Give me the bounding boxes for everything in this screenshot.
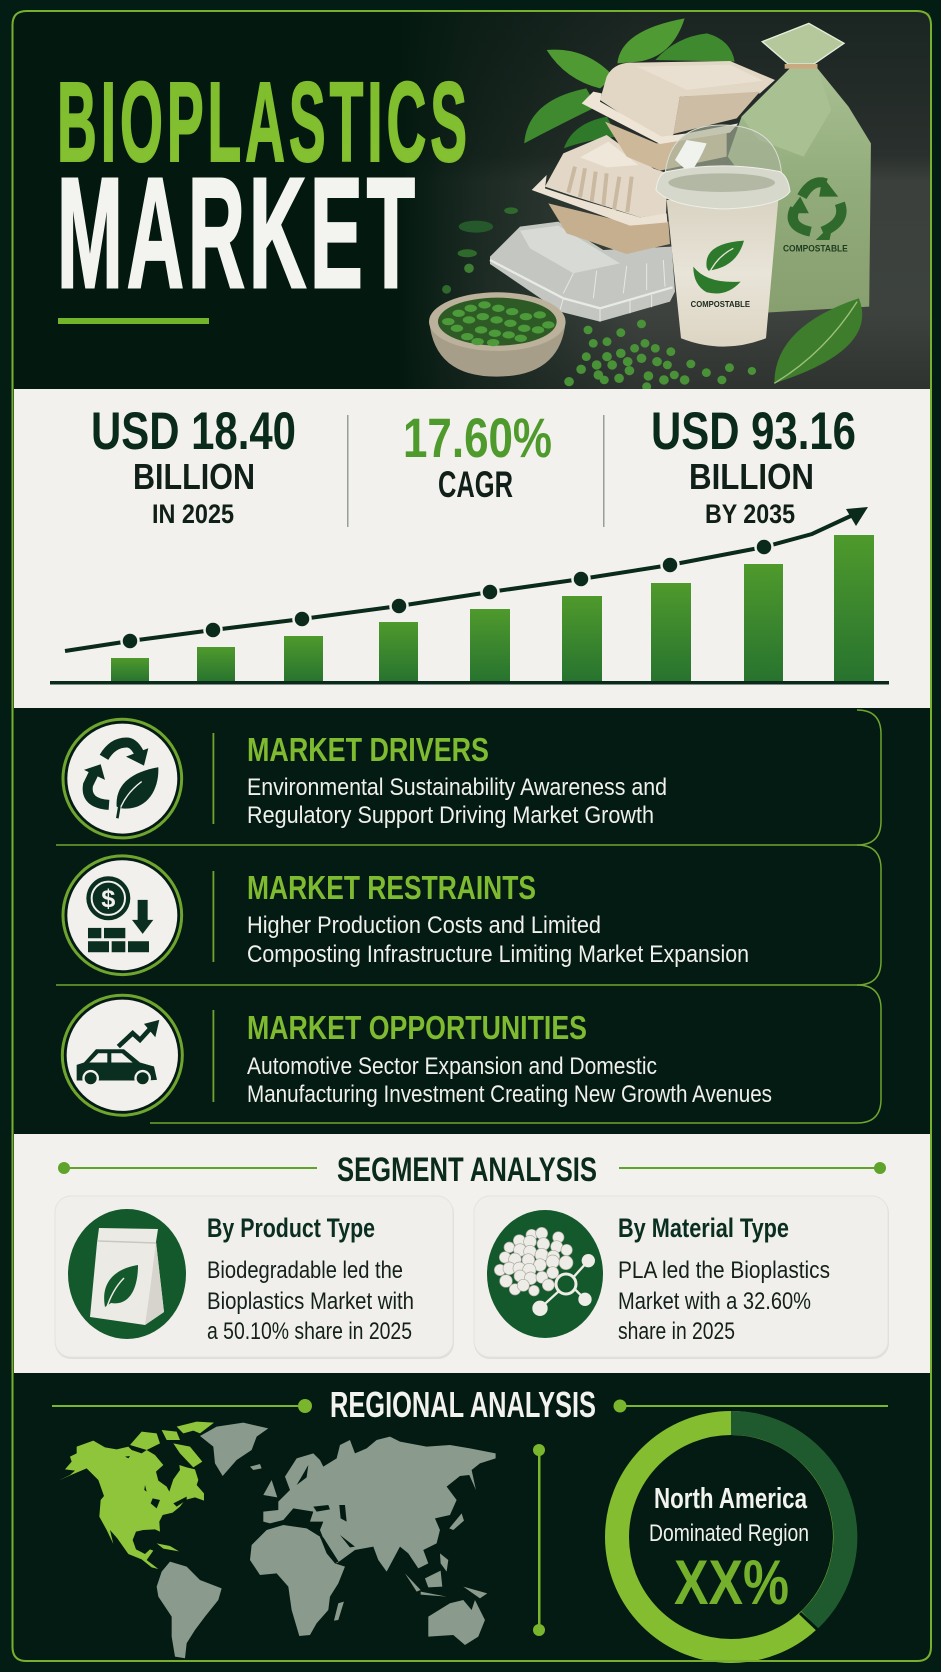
title underline bbox=[58, 318, 209, 324]
donut label: XX% bbox=[674, 1548, 789, 1618]
food containers bbox=[490, 61, 775, 322]
map: North America highlighted bbox=[58, 1422, 214, 1569]
donut label: Dominated Region bbox=[649, 1520, 809, 1547]
text: market restraints: Higher Production Costs and Limited bbox=[247, 912, 601, 939]
card: by product type bbox=[55, 1196, 454, 1359]
bowl of pellets bbox=[429, 292, 566, 377]
icon: recycling arrows and leaf bbox=[63, 719, 182, 838]
icon: PLA pellets and molecule bbox=[487, 1210, 603, 1338]
icon: compostable pouch bbox=[68, 1209, 186, 1339]
icon: cost and infrastructure: $ bbox=[101, 885, 115, 913]
panel: regional analysis bbox=[14, 1373, 930, 1661]
cup label: COMPOSTABLE bbox=[691, 299, 750, 309]
panel: hero bbox=[13, 11, 930, 391]
icon: car and rising arrow bbox=[62, 995, 182, 1115]
stat: 2035 value: BY 2035 bbox=[705, 499, 795, 529]
stat: 2035 value bbox=[651, 402, 856, 529]
text: product type: a 50.10% share in 2025 bbox=[207, 1318, 412, 1345]
text: market restraints: Composting Infrastructure Limiting Market Expansion bbox=[247, 941, 749, 968]
title line: Market: MARKET bbox=[57, 146, 419, 321]
text: market opportunities: MARKET OPPORTUNITIES bbox=[247, 1009, 587, 1046]
text: market restraints: MARKET RESTRAINTS bbox=[247, 869, 536, 906]
heading: regional analysis: REGIONAL ANALYSIS bbox=[330, 1384, 596, 1425]
stat: 2035 value: BILLION bbox=[689, 456, 814, 497]
text: material type: By Material Type bbox=[618, 1213, 789, 1243]
text: product type: Biodegradable led the bbox=[207, 1257, 403, 1284]
middle container bbox=[548, 203, 670, 254]
text: material type bbox=[618, 1213, 830, 1345]
stat: 2025 value: BILLION bbox=[133, 456, 255, 497]
text: market opportunities: Automotive Sector Expansion and Domestic bbox=[247, 1053, 657, 1080]
clear container bbox=[490, 222, 675, 322]
text: market opportunities bbox=[247, 1009, 772, 1108]
cup leaf logo bbox=[706, 241, 744, 271]
hero photo: bioplastic products bbox=[13, 12, 930, 391]
stat: 2035 value: USD 93.16 bbox=[651, 402, 856, 461]
donut chart: North America share bbox=[617, 1423, 845, 1651]
stat: CAGR: CAGR bbox=[438, 464, 513, 505]
text: market drivers: Regulatory Support Driving Market Growth bbox=[247, 802, 654, 829]
panel: market size stats and growth chart bbox=[14, 389, 930, 708]
stat: 2025 value bbox=[91, 402, 296, 529]
text: market restraints bbox=[247, 869, 749, 968]
text: product type: By Product Type bbox=[207, 1213, 375, 1243]
text: product type: Bioplastics Market with bbox=[207, 1288, 414, 1315]
text: product type bbox=[207, 1213, 414, 1345]
map: rest of world bbox=[157, 1423, 496, 1658]
text: market opportunities: Manufacturing Investment Creating New Growth Avenues bbox=[247, 1081, 772, 1108]
panel: market dynamics bbox=[14, 708, 930, 1134]
bag label: COMPOSTABLE bbox=[783, 244, 848, 254]
icon: cost and infrastructure bbox=[63, 856, 182, 975]
stat: 2025 value: USD 18.40 bbox=[91, 402, 296, 461]
top container bbox=[605, 122, 727, 171]
cup with dome lid bbox=[656, 125, 790, 347]
card: by material type bbox=[474, 1196, 889, 1359]
world map bbox=[58, 1422, 496, 1658]
stat: CAGR bbox=[403, 406, 552, 505]
text: market drivers: Environmental Sustainability Awareness and bbox=[247, 774, 667, 801]
stat: CAGR: 17.60% bbox=[403, 406, 552, 469]
text: material type: PLA led the Bioplastics bbox=[618, 1257, 830, 1284]
foreground items bbox=[429, 207, 862, 391]
bar chart with trend arrow bbox=[50, 507, 889, 684]
panel: hero: BIOPLASTICS bbox=[57, 59, 471, 185]
donut label bbox=[649, 1483, 809, 1618]
donut label: North America bbox=[654, 1483, 808, 1515]
title bbox=[57, 59, 471, 324]
text: material type: Market with a 32.60% bbox=[618, 1288, 811, 1315]
scattered pellets bbox=[442, 207, 756, 391]
foreground leaf bbox=[774, 298, 862, 383]
text: market drivers: MARKET DRIVERS bbox=[247, 731, 489, 768]
back leaves bbox=[524, 18, 735, 148]
stat: 2025 value: IN 2025 bbox=[152, 499, 234, 529]
text: material type: share in 2025 bbox=[618, 1318, 735, 1345]
bag recycling symbol bbox=[793, 182, 841, 232]
text: market drivers bbox=[247, 731, 667, 829]
compostable bag bbox=[728, 23, 871, 313]
divider between map and donut bbox=[533, 1444, 545, 1636]
heading: segment analysis: SEGMENT ANALYSIS bbox=[337, 1151, 597, 1189]
panel: segment analysis bbox=[14, 1134, 930, 1373]
